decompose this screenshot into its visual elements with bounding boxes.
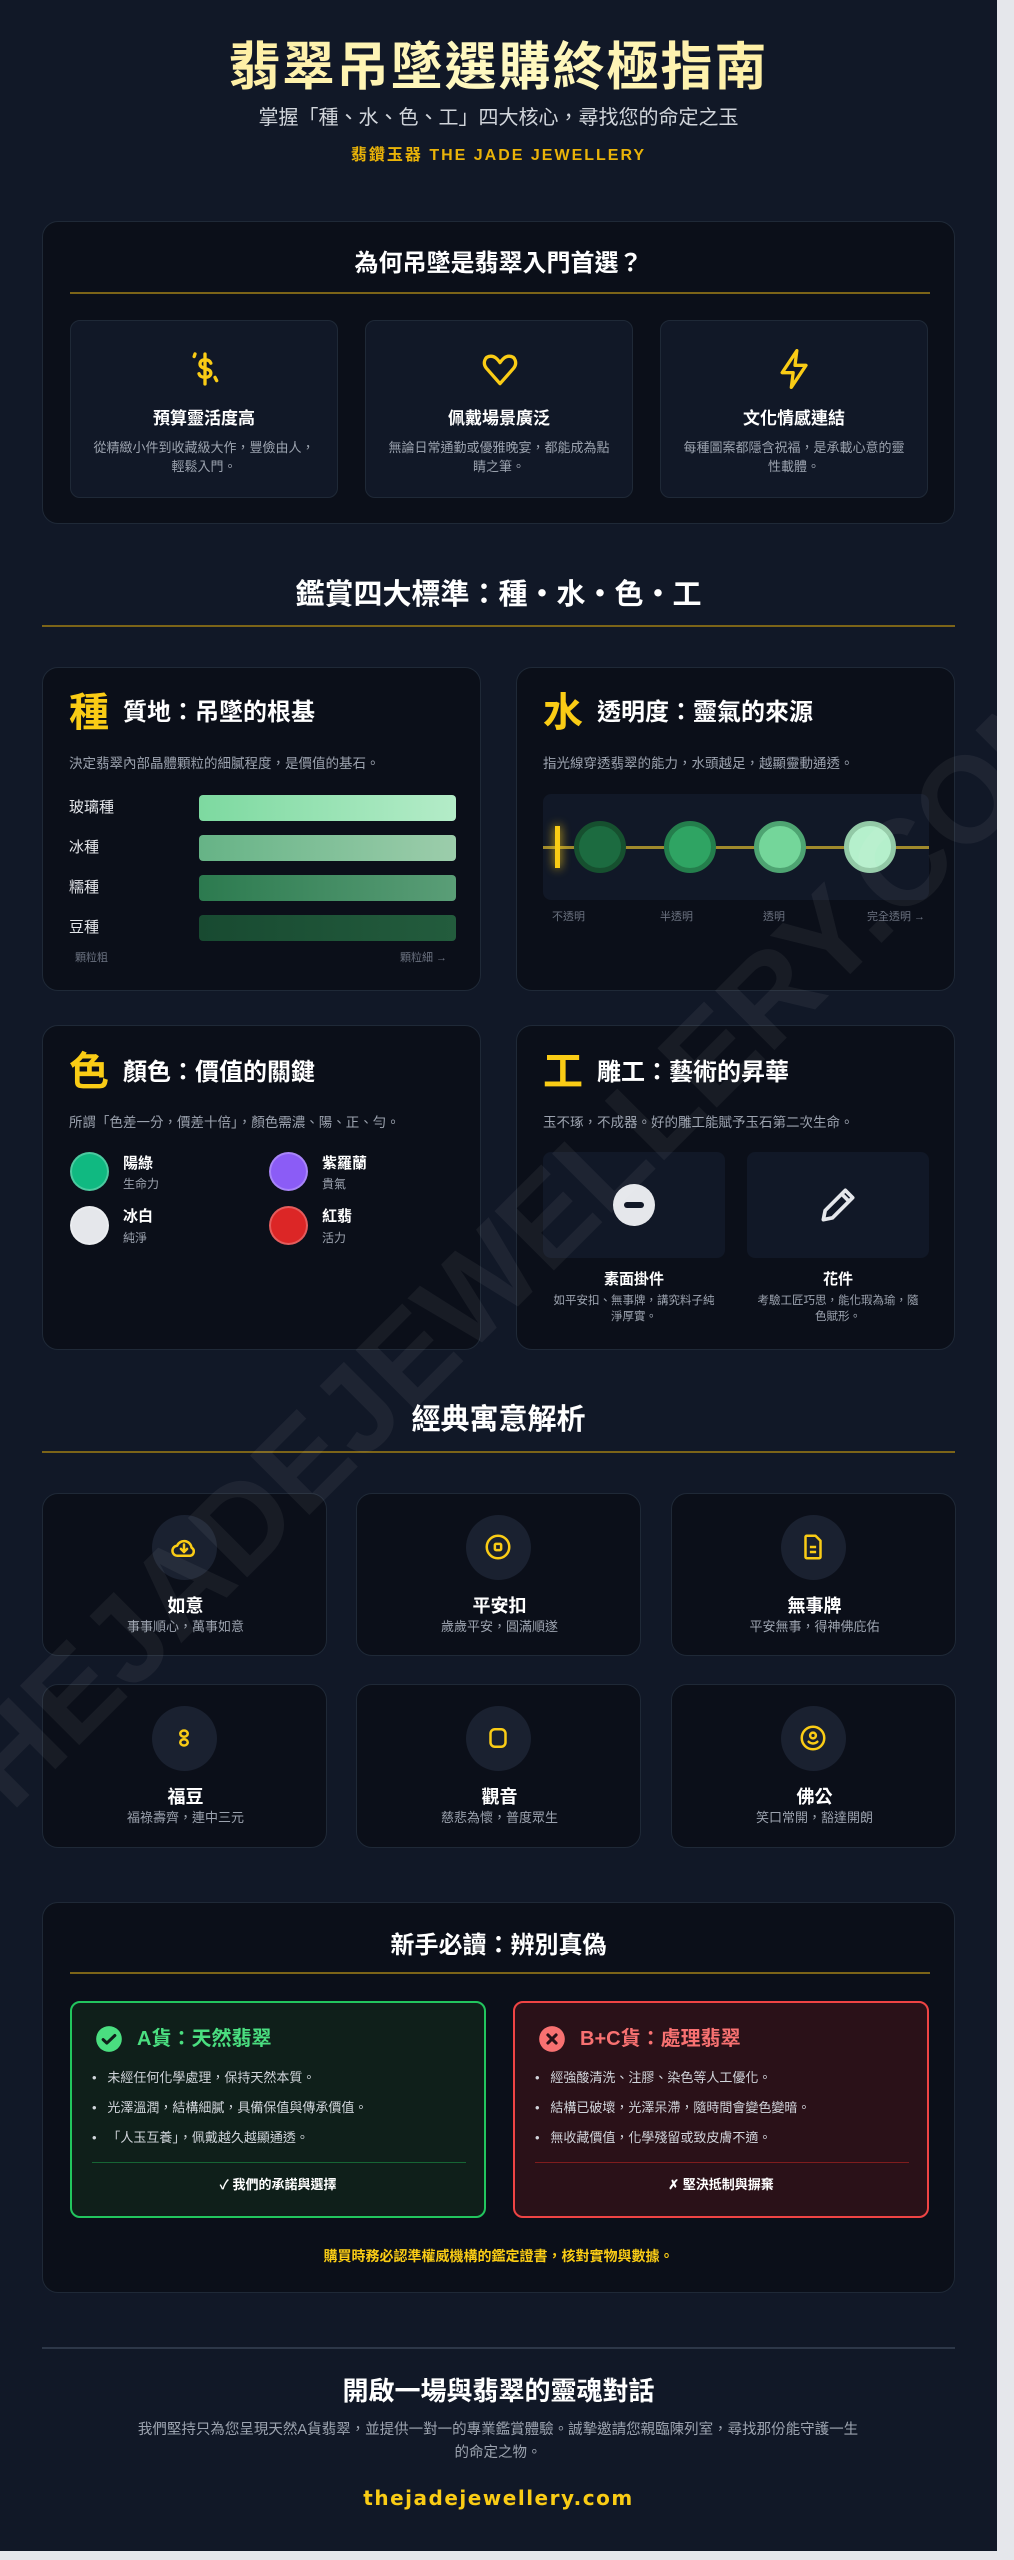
sub-card: budget	[70, 320, 338, 498]
bar chart: texture grades: 冰種	[69, 839, 99, 856]
sub-card: occasions	[365, 320, 633, 498]
CTA text: 我們堅持只為您呈現天然A貨翡翠，並提供一對一的專業鑑賞體驗。誠摯邀請您親臨陳列室，尋找那份能守護一生	[138, 2422, 858, 2438]
box: B+C grade: • 結構已破壞，光澤呆滯，隨時間會變色變暗。	[535, 2100, 810, 2115]
box: A grade	[70, 2001, 486, 2218]
url: thejadejewellery.com	[363, 2486, 634, 2510]
card: safety buckle	[356, 1493, 641, 1656]
card: plain tablet: 平安無事，得神佛庇佑	[749, 1619, 880, 1634]
card: ruyi: 如意	[168, 1596, 204, 1616]
card: plain tablet: 無事牌	[788, 1596, 842, 1616]
panel: 色 color	[42, 1025, 481, 1350]
heading: why: 為何吊墜是翡翠入門首選？	[354, 250, 642, 277]
panel: 水 transparency: 不透明	[552, 911, 585, 923]
panel: 種 texture: 種	[69, 691, 109, 735]
carving type: sculpted: 花件	[823, 1271, 853, 1288]
color swatches: 純淨	[123, 1231, 147, 1245]
card: buddha: 笑口常開，豁達開朗	[756, 1810, 873, 1825]
sub-card: culture: 每種圖案都隱含祝福，是承載心意的靈性載體。	[683, 440, 904, 474]
icon: cross	[539, 2026, 565, 2052]
panel: 工 carving	[516, 1025, 955, 1350]
icon: heart	[482, 354, 518, 386]
panel: 水 transparency	[516, 667, 955, 991]
panel: why pendant	[42, 221, 955, 524]
brand: 翡鑽玉器 THE JADE JEWELLERY	[351, 147, 646, 164]
card: plain tablet	[671, 1493, 956, 1656]
panel: 水 transparency: 透明度：靈氣的來源	[597, 699, 813, 726]
card: buddha	[671, 1684, 956, 1848]
panel: 水 transparency: 水	[543, 691, 583, 735]
icon: dollar	[192, 352, 218, 386]
color swatches: 活力	[322, 1231, 346, 1245]
subtitle: 掌握「種、水、色、工」四大核心，尋找您的命定之玉	[258, 107, 738, 129]
carving type: sculpted: 考驗工匠巧思，能化瑕為瑜，隨色賦形。	[758, 1295, 918, 1323]
note: certificate: 購買時務必認準權威機構的鑑定證書，核對實物與數據。	[324, 2248, 674, 2264]
bar chart: texture grades: 豆種	[69, 919, 99, 936]
box: B+C grade: ✗ 堅決抵制與摒棄	[668, 2177, 774, 2192]
panel: 工 carving: 玉不琢，不成器。好的雕工能賦予玉石第二次生命。	[543, 1115, 854, 1130]
icon: check	[96, 2026, 122, 2052]
panel: 色 color: 所謂「色差一分，價差十倍」，顏色需濃、陽、正、勻。	[69, 1115, 400, 1130]
card: buddha: 佛公	[796, 1787, 832, 1807]
color swatches: 紅翡	[322, 1208, 352, 1225]
carving type: plain	[543, 1152, 725, 1323]
card: fortune bean: 福豆	[168, 1787, 204, 1807]
bar chart: texture grades	[69, 795, 456, 964]
box: A grade: ✓ 我們的承諾與選擇	[219, 2177, 336, 2192]
card: safety buckle: 歲歲平安，圓滿順遂	[441, 1619, 558, 1634]
panel: 色 color: 色	[69, 1050, 109, 1094]
icon: pencil	[822, 1188, 855, 1222]
heading: four standards: 鑑賞四大標準：種・水・色・工	[295, 579, 702, 611]
color swatches: 陽綠	[123, 1155, 153, 1172]
panel: 工 carving: 雕工：藝術的昇華	[597, 1059, 789, 1086]
panel: 種 texture	[42, 667, 481, 991]
title: 翡翠吊墜選購終極指南	[228, 39, 768, 97]
icon: minus circle	[613, 1184, 655, 1226]
panel: 色 color: 顏色：價值的關鍵	[123, 1059, 315, 1086]
color swatches: 冰白	[123, 1208, 153, 1225]
sub-card: occasions: 無論日常通勤或優雅晚宴，都能成為點睛之筆。	[388, 440, 610, 474]
panel: 種 texture: 質地：吊墜的根基	[123, 699, 315, 726]
card: ruyi: 事事順心，萬事如意	[127, 1619, 244, 1634]
sub-card: budget: 預算靈活度高	[153, 409, 255, 428]
panel: 水 transparency: 半透明	[660, 911, 693, 923]
icon: bolt	[780, 349, 808, 389]
CTA heading: 開啟一場與翡翠的靈魂對話	[342, 2376, 654, 2406]
sub-card: culture: 文化情感連結	[743, 409, 845, 428]
box: A grade: A貨：天然翡翠	[137, 2028, 271, 2050]
bar chart: texture grades: 顆粒粗	[75, 952, 108, 964]
title	[0, 38, 997, 98]
box: B+C grade: • 無收藏價值，化學殘留或致皮膚不適。	[535, 2130, 771, 2145]
color swatches: 生命力	[123, 1177, 159, 1191]
box: B+C grade	[513, 2001, 929, 2218]
color swatches: 紫羅蘭	[322, 1155, 367, 1172]
card: fortune bean	[42, 1684, 327, 1848]
CTA text	[138, 2421, 858, 2461]
panel: 工 carving: 工	[543, 1050, 583, 1094]
card: guanyin: 慈悲為懷，普度眾生	[441, 1810, 558, 1825]
box: A grade: • 光澤溫潤，結構細膩，具備保值與傳承價值。	[92, 2100, 367, 2115]
card: ruyi	[42, 1493, 327, 1656]
sub-card: budget: 從精緻小件到收藏級大作，豐儉由人，輕鬆入門。	[93, 440, 314, 474]
color swatches: 貴氣	[322, 1177, 346, 1191]
carving type: plain: 如平安扣、無事牌，講究料子純淨厚實。	[554, 1295, 714, 1323]
panel: 水 transparency: 透明	[763, 911, 785, 923]
carving type: plain: 素面掛件	[604, 1271, 664, 1288]
panel: 水 transparency: 指光線穿透翡翠的能力，水頭越足，越顯靈動通透。	[543, 756, 854, 771]
card: safety buckle: 平安扣	[472, 1596, 526, 1616]
bar chart: texture grades: 顆粒細 →	[400, 952, 447, 964]
panel: authenticity	[42, 1902, 955, 2293]
panel: 種 texture: 決定翡翠內部晶體顆粒的細膩程度，是價值的基石。	[69, 756, 380, 771]
box: B+C grade: • 經強酸清洗、注膠、染色等人工優化。	[535, 2070, 771, 2085]
bar chart: texture grades: 玻璃種	[69, 799, 114, 816]
card: guanyin	[356, 1684, 641, 1848]
CTA text: 的命定之物。	[454, 2445, 542, 2461]
bar chart: texture grades: 糯種	[69, 879, 99, 896]
color swatches	[70, 1152, 367, 1245]
card: fortune bean: 福祿壽齊，連中三元	[127, 1810, 244, 1825]
box: B+C grade: B+C貨：處理翡翠	[580, 2028, 741, 2050]
box: A grade: • 「人玉互養」，佩戴越久越顯通透。	[92, 2130, 309, 2145]
heading: authenticity: 新手必讀：辨別真偽	[390, 1932, 606, 1959]
chart: transparency scale	[543, 794, 929, 900]
heading: meanings: 經典寓意解析	[411, 1404, 586, 1436]
carving type: sculpted	[747, 1152, 929, 1323]
panel: 水 transparency: 完全透明 →	[867, 911, 925, 923]
box: A grade: • 未經任何化學處理，保持天然本質。	[92, 2070, 315, 2085]
sub-card: occasions: 佩戴場景廣泛	[448, 409, 550, 428]
sub-card: culture	[660, 320, 928, 498]
card: guanyin: 觀音	[482, 1787, 518, 1807]
